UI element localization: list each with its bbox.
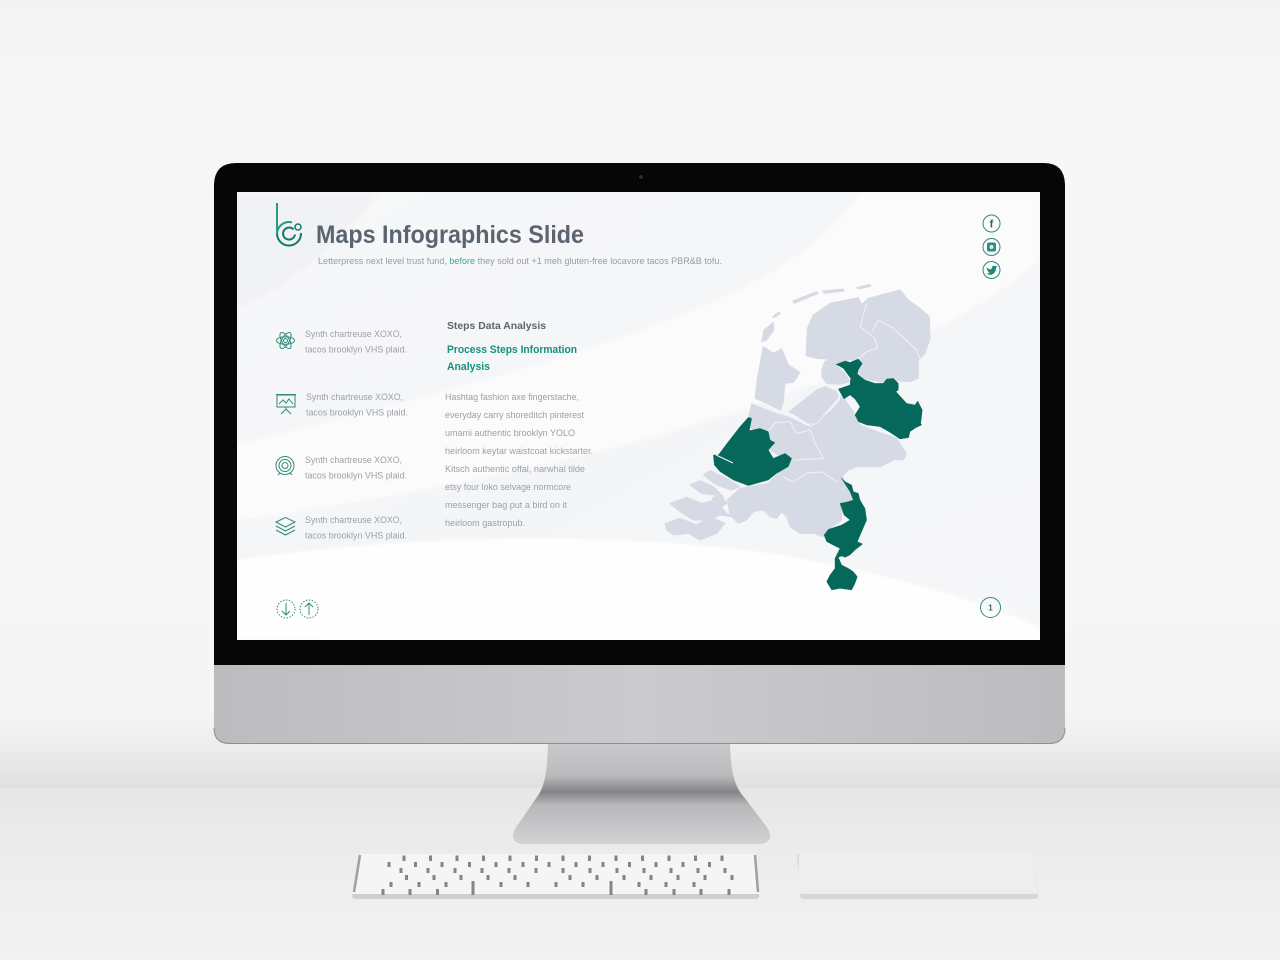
text: item 2: tacos brooklyn VHS plaid.	[306, 408, 408, 418]
map: province borders	[752, 303, 920, 460]
province: flevoland south	[789, 387, 838, 423]
icon: instagram	[983, 238, 1000, 256]
text: item 3: Synth chartreuse XOXO,	[305, 455, 402, 465]
map: inlet	[716, 455, 733, 463]
heading: steps data analysis: Steps Data Analysis	[447, 320, 546, 332]
icon: arrow up	[300, 600, 318, 618]
icon: arrow down	[277, 600, 295, 618]
navigation arrows	[277, 600, 318, 618]
province: friesland groningen drenthe	[806, 290, 930, 382]
icon: facebook: f	[990, 218, 994, 230]
text: item 1: tacos brooklyn VHS plaid.	[305, 344, 407, 354]
page number: 1	[988, 604, 993, 612]
text: item 3	[305, 455, 407, 480]
body paragraph: umami authentic brooklyn YOLO	[445, 428, 575, 438]
icon: atom	[276, 331, 294, 350]
icon: twitter	[983, 262, 1000, 278]
trackpad	[797, 853, 1038, 899]
map: highlighted provinces	[713, 359, 922, 590]
screen slide	[237, 192, 1040, 640]
bezel	[214, 163, 1065, 665]
body paragraph	[445, 392, 593, 528]
body paragraph: Hashtag fashion axe fingerstache,	[445, 392, 579, 402]
text: item 4	[305, 515, 407, 540]
icon: target	[276, 456, 294, 475]
body paragraph: etsy four loko selvage normcore	[445, 482, 571, 492]
icon: layers	[276, 518, 295, 535]
text: item 2: Synth chartreuse XOXO,	[306, 392, 403, 402]
text: item 4: Synth chartreuse XOXO,	[305, 515, 402, 525]
province: north holland	[755, 347, 800, 410]
key gaps	[383, 856, 732, 895]
body paragraph: everyday carry shoreditch pinterest	[445, 410, 584, 420]
camera	[639, 175, 643, 179]
feature list	[276, 329, 408, 540]
chin	[214, 665, 1065, 744]
text: item 3: tacos brooklyn VHS plaid.	[305, 470, 407, 480]
body paragraph: Kitsch authentic offal, narwhal tilde	[445, 464, 585, 474]
social icons	[983, 215, 1000, 278]
province: limburg	[824, 478, 867, 590]
text: item 1	[305, 329, 407, 354]
subtitle: Letterpress next level trust fund, before they sold out +1 meh gluten-free locavore tacos PBR&B tofu.	[318, 256, 722, 267]
stand rim	[514, 841, 769, 845]
text: item 2	[306, 392, 408, 418]
heading: process steps	[447, 344, 577, 373]
body paragraph: heirloom gastropub.	[445, 518, 525, 528]
body paragraph: messenger bag put a bird on it	[445, 500, 567, 510]
province: overijssel	[836, 359, 922, 439]
province: zeeland	[665, 471, 740, 540]
text: item 1: Synth chartreuse XOXO,	[305, 329, 402, 339]
icon: presentation board	[276, 394, 296, 414]
stand	[513, 744, 770, 846]
monitor	[214, 163, 1065, 846]
keyboard	[352, 854, 759, 899]
province: south mainland	[727, 395, 907, 537]
title: Maps Infographics Slide	[316, 221, 584, 249]
heading: process steps: Analysis	[447, 361, 490, 373]
map: grey provinces north	[755, 284, 930, 423]
text: item 4: tacos brooklyn VHS plaid.	[305, 530, 407, 540]
logo	[277, 203, 301, 246]
page number	[980, 598, 1000, 618]
heading: process steps: Process Steps Information	[447, 344, 577, 356]
map: southern border	[783, 472, 837, 482]
body paragraph: heirloom keytar waistcoat kickstarter.	[445, 446, 593, 456]
background swooshes	[237, 192, 1040, 520]
province: south holland	[713, 417, 792, 486]
wadden islands	[762, 284, 871, 342]
map: netherlands	[665, 284, 930, 590]
province: flevoland north	[822, 360, 850, 384]
map: grey provinces south	[727, 395, 907, 537]
